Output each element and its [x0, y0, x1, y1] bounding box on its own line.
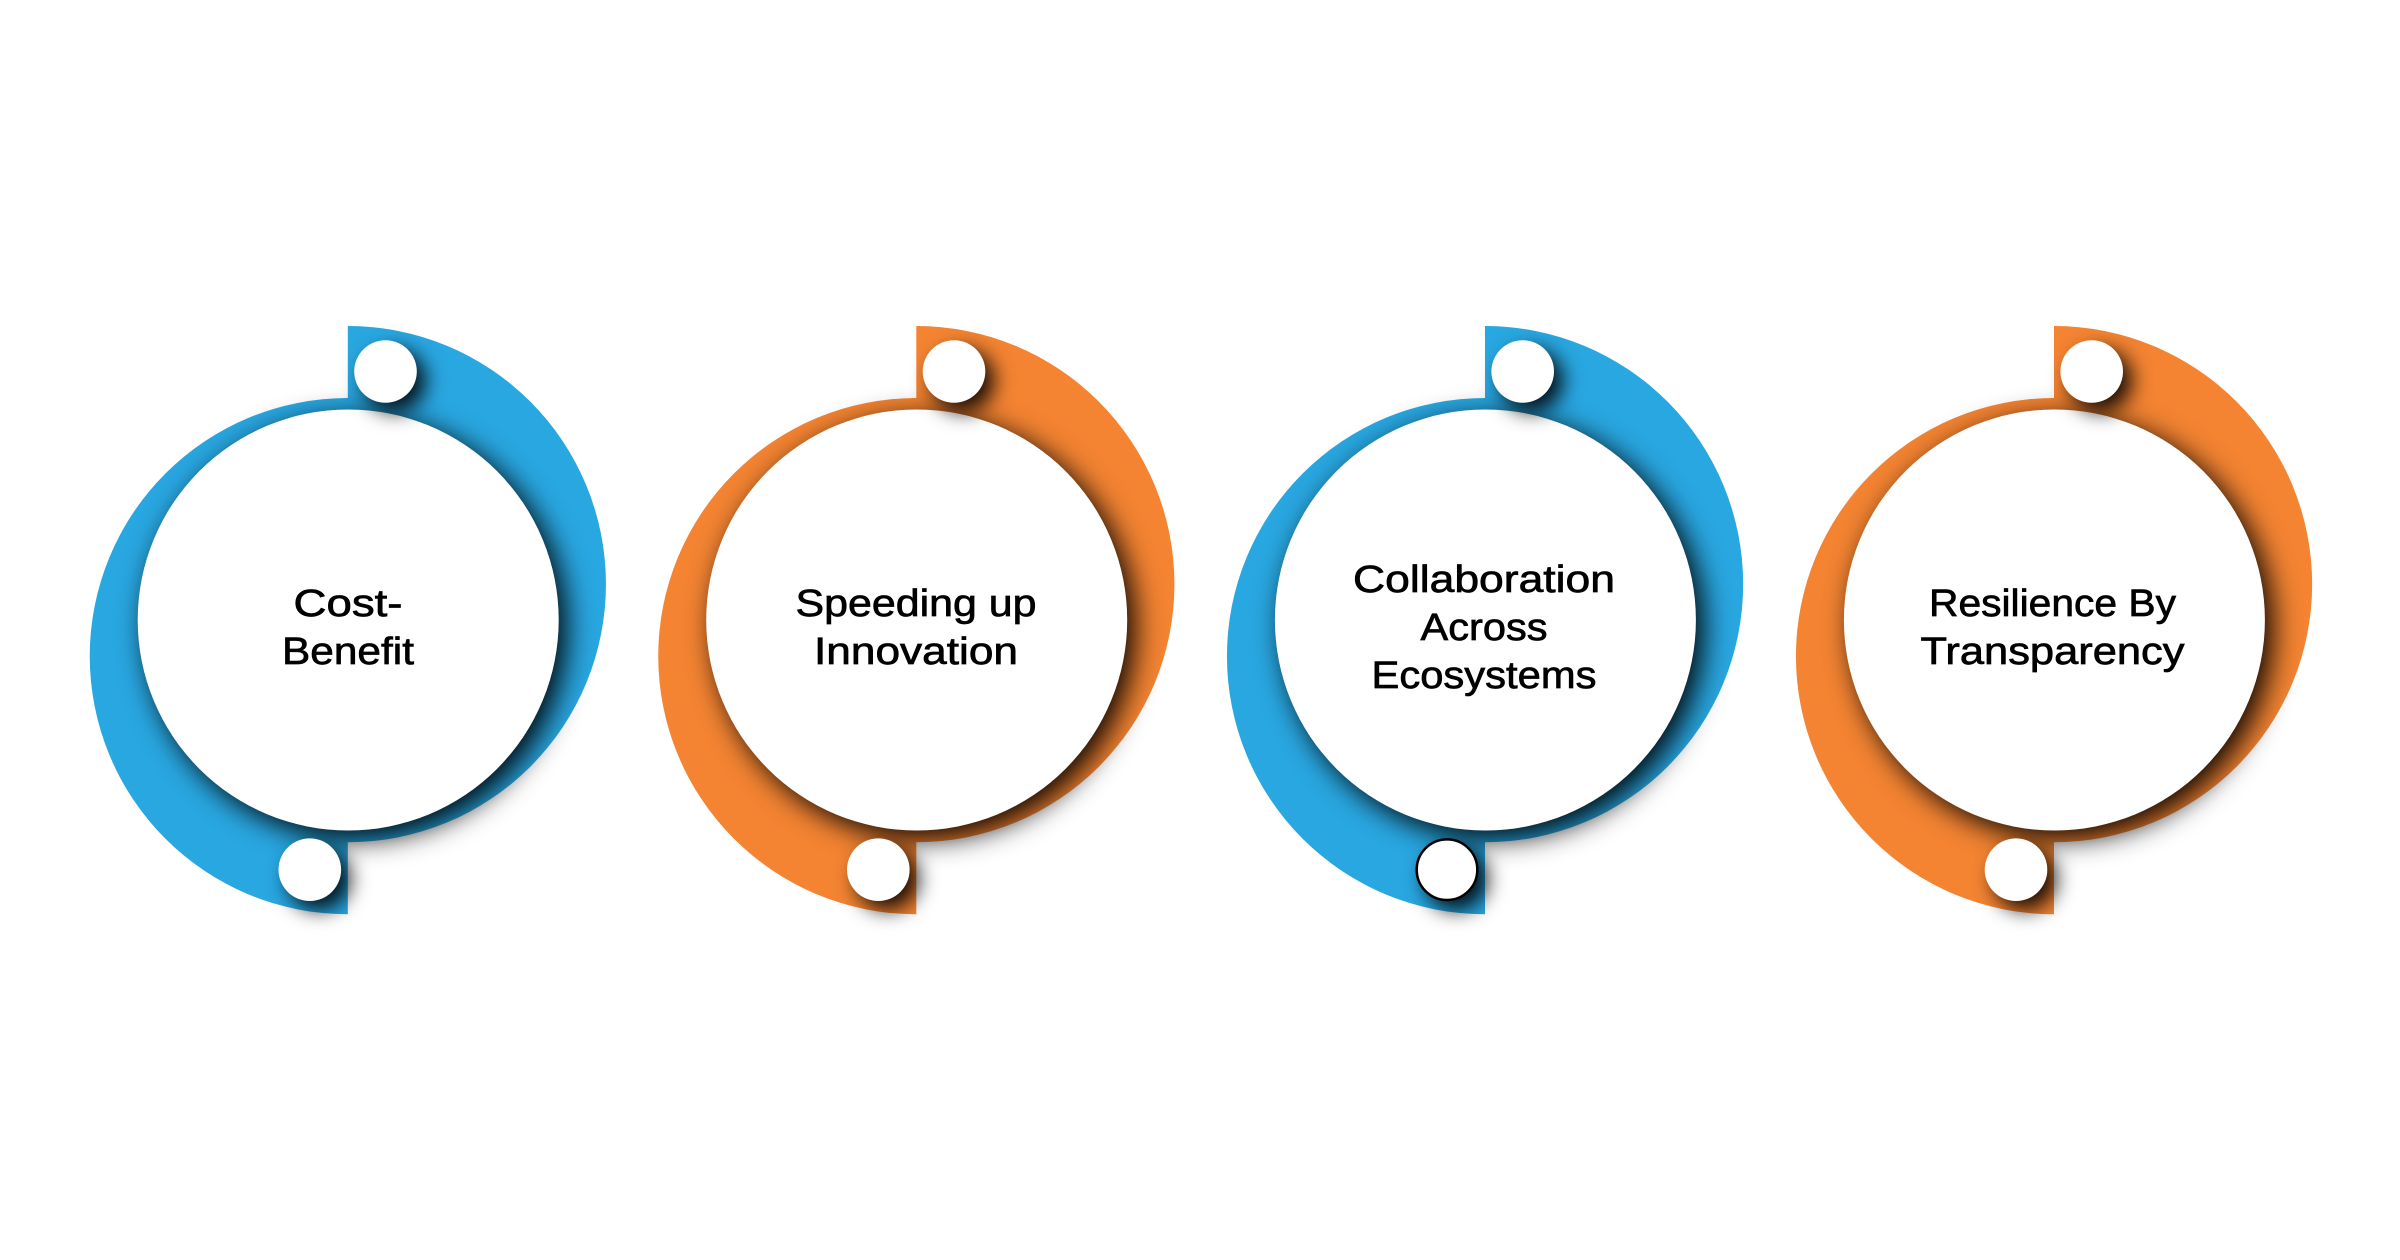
label: Cost-Benefit: [282, 583, 414, 673]
white main circle: [706, 410, 1127, 830]
panel: Resilience By Transparency: [1796, 326, 2312, 914]
panel: Cost-Benefit: [90, 326, 606, 914]
label: Collaboration Across Ecosystems: [1353, 559, 1615, 697]
label: Speeding up Innovation: Innovation: [814, 631, 1018, 673]
label: Collaboration Across Ecosystems: Ecosystems: [1372, 655, 1596, 697]
white main circle: [1275, 410, 1696, 830]
panel: Speeding up Innovation: [658, 326, 1174, 914]
white main circle: [138, 410, 559, 830]
label: Collaboration Across Ecosystems: Across: [1420, 607, 1548, 649]
label: Cost-Benefit: Cost-: [294, 583, 402, 625]
label: Collaboration Across Ecosystems: Collaboration: [1353, 559, 1615, 601]
bottom small circle, outlined: [1417, 839, 1477, 900]
top small circle: [2060, 340, 2123, 403]
label: Resilience By Transparency: [1920, 583, 2184, 673]
label: Cost-Benefit: Benefit: [282, 631, 414, 673]
panel: Collaboration Across Ecosystems: [1227, 326, 1743, 914]
label: Speeding up Innovation: [796, 583, 1036, 673]
white main circle: [1844, 410, 2265, 830]
label: Resilience By Transparency: Transparency: [1920, 631, 2184, 673]
bottom small circle: [847, 838, 910, 901]
bottom small circle: [278, 838, 341, 901]
top small circle: [354, 340, 417, 403]
top small circle: [923, 340, 985, 403]
orange swirl ring: [658, 326, 1174, 914]
bottom small circle: [1985, 838, 2047, 901]
label: Resilience By Transparency: Resilience By: [1929, 583, 2176, 625]
top small circle: [1491, 340, 1554, 403]
label: Speeding up Innovation: Speeding up: [796, 583, 1036, 625]
orange swirl ring: [1796, 326, 2312, 914]
blue swirl ring: [90, 326, 606, 914]
blue swirl ring: [1227, 326, 1743, 914]
